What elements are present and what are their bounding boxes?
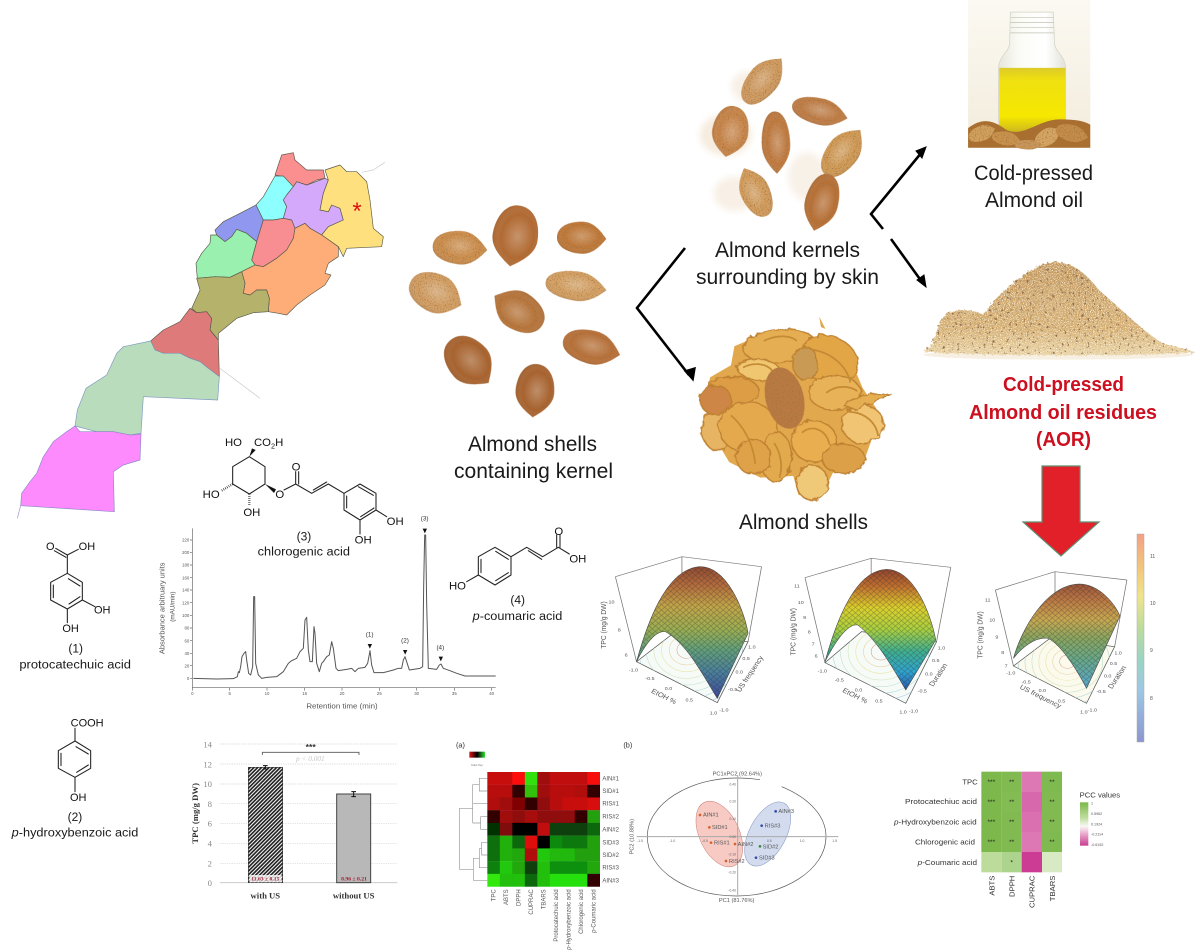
panel (a): clustered heatmap: Color Key: [471, 763, 483, 767]
chromatogram: (2): [401, 638, 409, 645]
3D response surface 3: US frequency vs duration: TPC (mg/g DW): [975, 611, 985, 659]
3D response surface 1: EtOH vs US frequency: 10: [609, 600, 615, 605]
panel (b): PCA biplot: RIS#2: [729, 859, 745, 865]
bar chart: TPC with and without US: 8: [208, 799, 212, 809]
molecule 3: chlorogenic acid: [203, 437, 404, 559]
chromatogram: (3): [421, 516, 429, 523]
arrow: shells fork to kernels and shells: [637, 248, 695, 380]
colour scale for surfaces: 10: [1150, 601, 1156, 607]
molecule 3: chlorogenic acid: H: [275, 437, 283, 449]
correlation heatmap: PCC values: [1080, 790, 1120, 799]
3D response surface 3: US frequency vs duration: -1.0: [1006, 671, 1016, 677]
molecule 4: p-coumaric acid: O: [554, 526, 563, 538]
panel (b): PCA biplot: -0.20: [728, 870, 736, 874]
molecule 3: chlorogenic acid: (3): [297, 530, 311, 544]
3D response surface 2: EtOH vs duration: 1.0: [938, 646, 945, 651]
panel (b): PCA biplot: AIN#1: [703, 813, 719, 819]
colour scale for surfaces: 9: [1150, 648, 1153, 654]
panel (a): clustered heatmap: (a): [456, 740, 465, 749]
correlation heatmap: 0.5962: [1091, 812, 1102, 816]
chromatogram: 80: [185, 626, 190, 631]
bar chart: TPC with and without US: 2: [208, 858, 212, 868]
3D response surface 1: EtOH vs US frequency: -0.5: [645, 676, 655, 682]
3D response surface 2: EtOH vs duration: 0.0: [855, 688, 862, 694]
panel (b): PCA biplot: SID#3: [759, 856, 775, 862]
3D response surface 2: EtOH vs duration: -1.0: [909, 709, 918, 715]
bar chart: TPC with and without US: 14: [203, 739, 213, 749]
3D response surface 2: EtOH vs duration: -0.5: [918, 689, 927, 694]
molecule 3: chlorogenic acid: 2: [271, 441, 275, 450]
arrows: kernels to oil and residues: [871, 147, 926, 287]
panel (b): PCA biplot: SID#1: [712, 825, 728, 831]
panel (b): PCA biplot: 0.00: [730, 835, 736, 839]
correlation heatmap: 1: [1091, 802, 1093, 806]
3D response surface 1: EtOH vs US frequency: 1.0: [710, 711, 717, 716]
molecule 4: p-coumaric acid: (4): [510, 593, 525, 607]
bar chart: TPC with and without US: 6: [208, 819, 213, 829]
3D response surface 3: US frequency vs duration: 0.5: [1110, 661, 1117, 667]
panel (a): clustered heatmap: RIS#3: [602, 866, 620, 872]
3D response surface 1: EtOH vs US frequency: 6: [625, 653, 628, 659]
bar chart: TPC with and without US: p < 0.001: [295, 754, 325, 763]
molecule 3: chlorogenic acid: CO: [254, 437, 271, 449]
molecule 1: protocatechuic acid: OH: [79, 541, 95, 553]
bar chart: TPC with and without US: 4: [208, 839, 213, 849]
molecule 3: chlorogenic acid: HO: [203, 489, 220, 501]
chromatogram: [159, 516, 496, 711]
3D response surface 3: US frequency vs duration: 9: [995, 635, 999, 641]
bar chart: TPC with and without US: [190, 739, 397, 900]
chromatogram: 15: [302, 691, 308, 696]
panel (a): clustered heatmap: AIN#2: [602, 827, 620, 833]
3D response surface 2: EtOH vs duration: 6: [815, 654, 818, 659]
caption: almond shells: Almond shells: [739, 511, 868, 534]
correlation heatmap: -0.6152: [1091, 843, 1103, 847]
molecule 1: protocatechuic acid: protocatechuic acid: [19, 657, 131, 671]
chromatogram: 0: [191, 691, 194, 696]
bar chart: TPC with and without US: with US: [251, 890, 280, 900]
molecule 3: chlorogenic acid: chlorogenic acid: [258, 545, 350, 559]
colour scale for surfaces: 8: [1150, 696, 1153, 702]
correlation heatmap: **: [1009, 799, 1015, 806]
correlation heatmap: ***: [987, 779, 996, 786]
3D response surface 3: US frequency vs duration: 0.0: [1104, 674, 1112, 679]
caption: almond kernels surrounding by skin: Almond kernels: [715, 239, 860, 262]
correlation heatmap: p-Hydroxybenzoic acid: [893, 818, 977, 827]
molecule 3: chlorogenic acid: OH: [355, 534, 372, 546]
panel (a): clustered heatmap: [456, 740, 620, 951]
molecule 3: chlorogenic acid: HO: [225, 437, 242, 449]
3D response surface 3: US frequency vs duration: -1.0: [1088, 708, 1097, 714]
bar chart: TPC with and without US: 12: [203, 759, 212, 769]
correlation heatmap: TBARS: [1048, 876, 1057, 901]
chromatogram: 160: [182, 575, 190, 580]
bar chart: TPC with and without US: 0: [208, 878, 212, 888]
panel (b): PCA biplot: 0.5: [767, 839, 772, 843]
caption: almond kernels surrounding by skin: [696, 239, 879, 289]
3D response surface 2: EtOH vs duration: 0.0: [925, 672, 933, 677]
chromatogram: (mAU/min): [169, 592, 176, 622]
photo: almond kernels: [700, 49, 873, 235]
chromatogram: 25: [377, 691, 382, 696]
molecule 1: protocatechuic acid: OH: [62, 623, 79, 635]
panel (b): PCA biplot: RIS#3: [765, 823, 780, 829]
bar chart: TPC with and without US: TPC (mg/g DW): [190, 783, 200, 844]
panel (a): clustered heatmap: TBARS: [542, 889, 548, 909]
correlation heatmap: **: [1049, 819, 1055, 826]
molecule 3: chlorogenic acid: OH: [387, 516, 404, 528]
panel (b): PCA biplot: -0.40: [728, 888, 736, 892]
chromatogram: Retention time (min): [306, 704, 378, 711]
caption: cold-pressed almond oil residues in red: [969, 374, 1157, 451]
3D response surface 3: US frequency vs duration: [975, 572, 1128, 716]
panel (a): clustered heatmap: DPPH: [517, 889, 523, 906]
3D response surface 3: US frequency vs duration: 7: [1005, 664, 1008, 670]
panel (a): clustered heatmap: RIS#1: [602, 802, 620, 808]
chromatogram: 20: [185, 663, 190, 668]
caption: cold-pressed almond oil residues in red: Almond oil residues: [969, 402, 1157, 424]
3D response surface 2: EtOH vs duration: 11: [794, 584, 800, 589]
correlation heatmap: [893, 772, 1120, 908]
chromatogram: 10: [265, 691, 270, 696]
3D response surface 1: EtOH vs US frequency: 1.0: [748, 645, 756, 650]
caption: almond shells containing kernel: Almond shells: [468, 433, 597, 456]
panel (b): PCA biplot: 0.40: [730, 782, 736, 786]
molecule 4: p-coumaric acid: [449, 526, 586, 623]
caption: cold-pressed almond oil residues in red: (AOR): [1036, 429, 1091, 451]
panel (b): PCA biplot: PC2 (10.88%): [629, 819, 635, 854]
chromatogram: 200: [182, 550, 190, 555]
3D response surface 1: EtOH vs US frequency: 8: [618, 628, 621, 634]
panel (b): PCA biplot: RIS#1: [714, 841, 730, 847]
panel (a): clustered heatmap: p-Hydroxybenzoic acid: [567, 889, 573, 951]
chromatogram: 140: [182, 588, 190, 593]
correlation heatmap: **: [1049, 779, 1055, 786]
molecule 2: p-hydroxybenzoic acid: [11, 718, 138, 840]
correlation heatmap: **: [1009, 819, 1015, 826]
caption: almond kernels surrounding by skin: surrounding by skin: [696, 266, 879, 289]
3D response surface 1: EtOH vs US frequency: 0.0: [665, 686, 672, 692]
3D response surface 2: EtOH vs duration: EtOH %: [841, 686, 870, 706]
chromatogram: (4): [436, 644, 444, 651]
molecule 2: p-hydroxybenzoic acid: COOH: [71, 718, 104, 730]
3D response surface 3: US frequency vs duration: 8: [1001, 650, 1004, 656]
correlation heatmap: 0.1924: [1091, 822, 1102, 826]
3D response surface 1: EtOH vs US frequency: [598, 557, 766, 716]
correlation heatmap: ***: [987, 819, 996, 826]
correlation heatmap: **: [1009, 779, 1015, 786]
3D response surface 2: EtOH vs duration: 8: [808, 630, 811, 635]
molecule 2: p-hydroxybenzoic acid: p-hydroxybenzoic acid: [11, 826, 138, 840]
chromatogram: 30: [414, 691, 420, 696]
3D response surface 2: EtOH vs duration: 10: [798, 600, 804, 606]
panel (a): clustered heatmap: SID#3: [602, 840, 620, 846]
caption: cold-pressed almond oil residues in red: Cold-pressed: [1003, 374, 1124, 396]
correlation heatmap: TPC: [962, 777, 978, 786]
3D response surface 1: EtOH vs US frequency: TPC (mg/g DW): [598, 601, 608, 649]
correlation heatmap: **: [1049, 839, 1055, 846]
correlation heatmap: -0.2114: [1091, 833, 1103, 837]
3D response surface 2: EtOH vs duration: Duration: [927, 662, 949, 688]
correlation heatmap: ABTS: [987, 876, 996, 896]
molecule 4: p-coumaric acid: HO: [449, 580, 466, 592]
3D response surface 3: US frequency vs duration: 1.0: [1114, 651, 1122, 656]
panel (b): PCA biplot: PC1 (81.76%): [719, 898, 755, 904]
photo: almond shells containing kernel: [402, 202, 624, 419]
molecule 3: chlorogenic acid: O: [275, 489, 284, 501]
3D response surface 2: EtOH vs duration: TPC (mg/g DW): [788, 608, 798, 655]
panel (a): clustered heatmap: TPC: [492, 889, 498, 901]
3D response surface 2: EtOH vs duration: -1.0: [818, 669, 827, 675]
3D response surface 1: EtOH vs US frequency: 0.5: [742, 656, 750, 662]
3D response surface 1: EtOH vs US frequency: -1.0: [629, 668, 638, 673]
panel (b): PCA biplot: PC1xPC2 (92.64%): [713, 772, 762, 778]
panel (a): clustered heatmap: ABTS: [504, 889, 510, 905]
molecule 3: chlorogenic acid: O: [292, 462, 301, 474]
3D response surface 2: EtOH vs duration: 9: [803, 615, 806, 621]
panel (b): PCA biplot: 0.20: [730, 800, 736, 804]
3D response surface 1: EtOH vs US frequency: -0.5: [728, 687, 738, 693]
chromatogram: Absorbance arbitruary units: [159, 562, 166, 654]
molecule 4: p-coumaric acid: p-coumaric acid: [472, 609, 562, 623]
panel (b): PCA biplot: -0.10: [728, 852, 736, 856]
correlation heatmap: **: [1049, 799, 1055, 806]
3D response surface 3: US frequency vs duration: 10: [989, 618, 996, 624]
colour scale for surfaces: [1137, 534, 1156, 742]
chromatogram: 100: [182, 613, 190, 618]
3D response surface 3: US frequency vs duration: US frequency: [1018, 683, 1064, 710]
molecule 4: p-coumaric acid: OH: [569, 553, 586, 565]
molecule 2: p-hydroxybenzoic acid: OH: [70, 792, 87, 804]
3D response surface 1: EtOH vs US frequency: 0.0: [736, 670, 743, 675]
photo: pile of almond oil residues: [923, 262, 1195, 360]
panel (a): clustered heatmap: AIN#1: [602, 776, 620, 782]
panel (b): PCA biplot: -1.0: [669, 839, 675, 843]
caption: almond shells containing kernel: [454, 433, 613, 483]
chromatogram: 5: [228, 691, 231, 696]
3D response surface 3: US frequency vs duration: 0.0: [1039, 688, 1046, 694]
chromatogram: 220: [182, 538, 190, 543]
molecule 2: p-hydroxybenzoic acid: (2): [68, 810, 82, 824]
chromatogram: 20: [340, 691, 345, 696]
3D response surface 3: US frequency vs duration: 1.0: [1080, 710, 1088, 716]
chromatogram: 35: [452, 691, 457, 696]
map of Morocco regions: [17, 153, 385, 518]
bar chart: TPC with and without US: ***: [306, 742, 316, 752]
panel (a): clustered heatmap: Chlorogenic acid: [579, 889, 585, 934]
panel (a): clustered heatmap: SID#2: [602, 853, 620, 859]
correlation heatmap: Protocatechiuc acid: [905, 797, 977, 806]
3D response surface 2: EtOH vs duration: 0.5: [932, 658, 940, 664]
3D response surface 2: EtOH vs duration: 0.5: [875, 699, 883, 705]
3D response surface 3: US frequency vs duration: 11: [985, 598, 991, 604]
bar chart: TPC with and without US: 10: [203, 779, 212, 789]
chromatogram: 40: [489, 691, 495, 696]
3D response surface 2: EtOH vs duration: -0.5: [835, 678, 844, 684]
3D response surface 3: US frequency vs duration: 0.5: [1058, 699, 1065, 704]
correlation heatmap: **: [1009, 839, 1015, 846]
correlation heatmap: ***: [987, 799, 996, 806]
panel (a): clustered heatmap: RIS#2: [602, 815, 620, 821]
panel (b): PCA biplot: -0.5: [702, 839, 708, 843]
chromatogram: 60: [185, 638, 190, 643]
panel (a): clustered heatmap: Protocatechuic acid: [554, 889, 560, 942]
bar chart: TPC with and without US: without US: [333, 890, 375, 900]
colour scale for surfaces: 11: [1150, 554, 1155, 560]
caption: cold-pressed almond oil: [974, 162, 1093, 212]
3D response surface 3: US frequency vs duration: -0.5: [1022, 680, 1031, 685]
chromatogram: 180: [182, 563, 190, 568]
3D response surface 3: US frequency vs duration: -0.5: [1097, 689, 1106, 695]
correlation heatmap: *: [1010, 859, 1013, 866]
3D response surface 3: US frequency vs duration: Duration: [1105, 664, 1128, 690]
3D response surface 2: EtOH vs duration: [788, 558, 951, 715]
panel (a): clustered heatmap: SID#1: [602, 789, 620, 795]
panel (a): clustered heatmap: p-Coumaric acid: [592, 889, 598, 934]
molecule 1: protocatechuic acid: [19, 541, 131, 671]
panel (b): PCA biplot: 1.0: [800, 839, 804, 843]
chromatogram: 40: [185, 651, 190, 656]
panel (b): PCA biplot: 1.5: [832, 839, 837, 843]
correlation heatmap: p-Coumaric acid: [917, 858, 977, 867]
chromatogram: (1): [366, 632, 374, 639]
3D response surface 1: EtOH vs US frequency: US frequency: [734, 654, 766, 693]
correlation heatmap: ***: [987, 839, 996, 846]
panel (b): PCA biplot: 0.10: [730, 817, 736, 821]
photo: almond shell pieces: [700, 317, 890, 500]
panel (b): PCA biplot: [623, 740, 838, 904]
panel (b): PCA biplot: (b): [623, 740, 632, 749]
molecule 1: protocatechuic acid: (1): [68, 642, 83, 656]
photo: bottle of almond oil: [966, 0, 1090, 151]
3D response surface 1: EtOH vs US frequency: 0.5: [685, 698, 693, 704]
bar chart: TPC with and without US: 11.63 ± 0.15: [251, 876, 280, 882]
bar chart: TPC with and without US: 8.96 ± 0.21: [341, 876, 367, 882]
panel (b): PCA biplot: SID#2: [763, 844, 778, 850]
3D response surface 2: EtOH vs duration: 1.0: [899, 710, 907, 715]
correlation heatmap: CUPRAC: [1028, 875, 1037, 908]
panel (b): PCA biplot: AIN#2: [738, 842, 753, 848]
molecule 1: protocatechuic acid: O: [46, 541, 55, 553]
caption: cold-pressed almond oil: Cold-pressed: [974, 162, 1093, 185]
3D response surface 2: EtOH vs duration: 7: [812, 642, 815, 647]
molecule 1: protocatechuic acid: OH: [94, 605, 111, 617]
panel (b): PCA biplot: -1.5: [637, 839, 643, 843]
panel (b): PCA biplot: AIN#3: [778, 809, 794, 815]
caption: cold-pressed almond oil: Almond oil: [985, 189, 1083, 212]
caption: almond shells containing kernel: containing kernel: [454, 460, 613, 483]
3D response surface 1: EtOH vs US frequency: EtOH %: [650, 687, 679, 706]
panel (a): clustered heatmap: AIN#3: [602, 878, 620, 884]
asterisk marker: *: [352, 198, 362, 225]
3D response surface 1: EtOH vs US frequency: -1.0: [719, 708, 729, 714]
molecule 3: chlorogenic acid: OH: [243, 507, 260, 519]
big red arrow down: [1023, 466, 1099, 556]
chromatogram: 120: [182, 600, 190, 605]
correlation heatmap: DPPH: [1008, 876, 1017, 897]
chromatogram: 0: [187, 676, 190, 681]
correlation heatmap: Chlorogenic acid: [915, 838, 975, 847]
panel (a): clustered heatmap: CUPRAC: [529, 889, 535, 915]
